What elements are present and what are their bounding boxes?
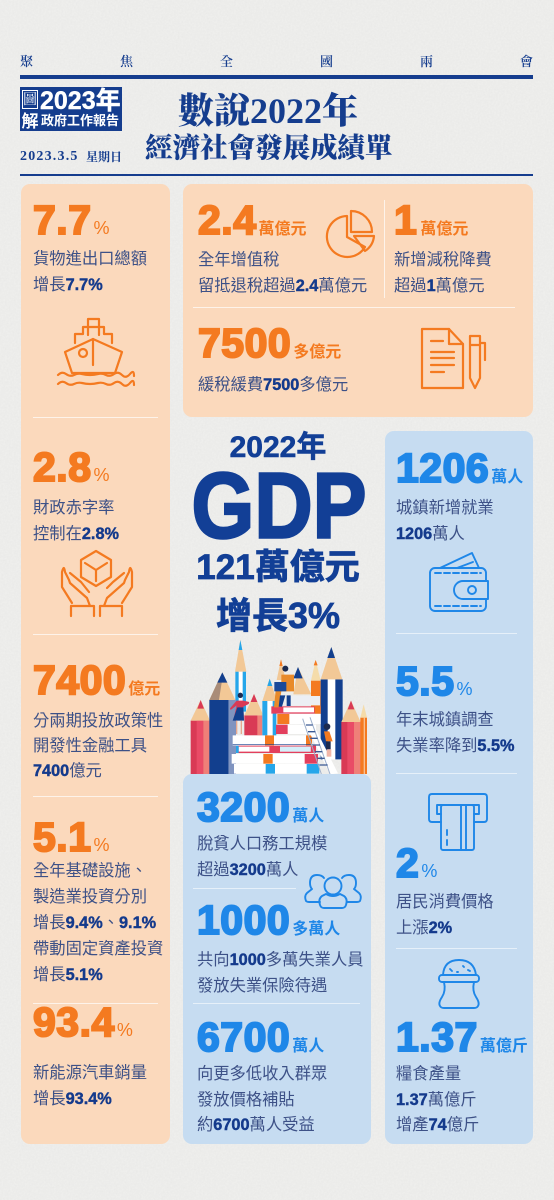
panel: right blue column [385,431,533,1144]
date: 2023.3.5 [20,149,79,164]
stat: 7500多億元: 緩稅緩費7500多億元 [198,376,348,394]
header strip: 聚焦全國兩會 [20,54,533,69]
stat: 7400億元: 分兩期投放政策性 [33,712,163,730]
panel: top orange tax panel [183,184,533,417]
GDP heading: 2022年: 2022年 [230,431,326,464]
header strip: 聚焦全國兩會: 全 [220,54,233,69]
stat: 2.8% [33,444,119,543]
date: 星期日 [86,150,122,164]
icon: people [304,874,362,909]
stat: 5.1%: 增長9.4%、9.1% [33,914,156,932]
GDP value: 121萬億元: 121萬億元 [196,548,360,587]
subtitle: 經濟社會發展成績單 [145,132,392,163]
stat: 5.1% [33,814,163,984]
stat: 1萬億元 [394,197,492,295]
header strip: 聚焦全國兩會: 會 [520,54,533,69]
stat: 2.4萬億元: 留抵退稅超過2.4萬億元 [198,277,367,295]
header strip: 聚焦全國兩會: 焦 [120,54,133,69]
stat: 2.8%: 2.8% [33,444,110,490]
stat: 5.1%: 帶動固定資產投資 [33,940,163,958]
icon: card machine [428,793,488,851]
stat: 5.5%: 5.5% [396,658,473,704]
icon: ship [56,318,136,387]
stat: 1萬億元: 1萬億元 [394,197,468,243]
stat: 1206萬人: 1206萬人 [396,525,465,543]
stat: 3200萬人: 脫貧人口務工規模 [197,835,327,853]
stat: 7500多億元: 7500多億元 [198,320,341,366]
stat: 3200萬人 [196,784,327,879]
stat: 93.4% [33,999,147,1108]
stat: 2.8%: 控制在2.8% [33,525,119,543]
stat: 7400億元 [33,657,163,780]
icon: hands holding box [60,550,134,618]
stat: 7.7%: 增長7.7% [33,276,103,294]
stat: 2.8%: 財政赤字率 [33,499,114,517]
icon: pie chart [326,210,376,258]
stat: 6700萬人: 約6700萬人受益 [197,1116,315,1134]
stat: 1000多萬人: 1000多萬人 [197,897,340,943]
stat: 1萬億元: 超過1萬億元 [394,277,484,295]
panel: middle blue employment panel [183,774,371,1144]
badge: 圖解 2023年 政府工作報告: 解 [22,107,38,132]
stat: 5.1%: 增長5.1% [33,966,103,984]
stat: 5.5%: 失業率降到5.5% [396,737,515,755]
stat: 2.4萬億元: 2.4萬億元 [198,197,307,243]
stat: 93.4%: 新能源汽車銷量 [33,1064,147,1082]
icon: wallet [429,552,489,612]
stat: 2% [396,840,494,937]
stat: 5.1%: 全年基礎設施、 [33,862,147,880]
stat: 1206萬人: 城鎮新增就業 [396,499,494,517]
stat: 1000多萬人: 共向1000多萬失業人員 [197,951,364,969]
stat: 1.37萬億斤: 糧食產量 [396,1065,461,1083]
stat: 1.37萬億斤: 增產74億斤 [396,1116,479,1134]
stat: 6700萬人: 6700萬人 [197,1014,324,1060]
header strip: 聚焦全國兩會: 聚 [20,54,33,69]
stat: 1萬億元: 新增減稅降費 [394,251,492,269]
icon: grain sack [438,959,480,1009]
badge: 圖解 2023年 政府工作報告: 2023年 [40,87,121,115]
stat: 5.5% [396,658,515,755]
stat: 1.37萬億斤 [396,1014,528,1134]
stat: 6700萬人: 發放價格補貼 [197,1091,295,1109]
icon: document and pen [420,328,486,390]
date [20,149,122,164]
stat: 7.7%: 7.7% [33,197,110,243]
header strip: 聚焦全國兩會: 國 [320,54,333,69]
badge: 圖解 2023年 政府工作報告: 圖 [23,89,37,109]
GDP heading: GDP: GDP [192,454,366,558]
badge: 圖解 2023年 政府工作報告 [20,87,122,131]
stat: 7.7%: 貨物進出口總額 [33,250,147,268]
header bottom rule [20,174,533,176]
stat: 1000多萬人: 發放失業保險待遇 [197,977,327,995]
badge: 圖解 2023年 政府工作報告: 政府工作報告 [41,113,119,128]
panel: left orange column [21,184,170,1144]
stat: 2.4萬億元 [198,197,367,295]
stat: 3200萬人: 3200萬人 [197,784,324,830]
stat: 7400億元: 7400億元 [33,762,102,780]
header top rule [20,75,533,79]
illustration: pencils and books [190,640,367,774]
stat: 2%: 居民消費價格 [396,893,494,911]
stat: 1206萬人 [396,445,523,543]
stat: 6700萬人: 向更多低收入群眾 [197,1065,327,1083]
stat: 5.1%: 5.1% [33,814,110,860]
stat: 7400億元: 7400億元 [33,657,160,703]
stat: 5.1%: 製造業投資分別 [33,888,147,906]
stat: 2.4萬億元: 全年增值稅 [198,251,279,269]
stat: 7500多億元 [198,320,348,394]
title: 數說2022年 [178,91,358,131]
stat: 6700萬人 [197,1014,327,1134]
stat: 93.4%: 增長93.4% [33,1090,112,1108]
stat: 1.37萬億斤: 1.37萬億斤 [396,1014,528,1060]
GDP growth: 增長3%: 增長3% [216,595,340,636]
stat: 2%: 上漲2% [396,919,452,937]
stat: 1206萬人: 1206萬人 [396,445,523,491]
stat: 3200萬人: 超過3200萬人 [197,861,298,879]
stat: 7.7% [33,197,147,294]
header strip: 聚焦全國兩會: 兩 [420,54,433,69]
stat: 93.4%: 93.4% [33,999,133,1045]
stat: 7400億元: 開發性金融工具 [33,737,147,755]
stat: 5.5%: 年末城鎮調查 [396,711,494,729]
stat: 2%: 2% [396,840,437,886]
stat: 1.37萬億斤: 1.37萬億斤 [396,1091,477,1109]
stat: 1000多萬人 [197,897,364,995]
